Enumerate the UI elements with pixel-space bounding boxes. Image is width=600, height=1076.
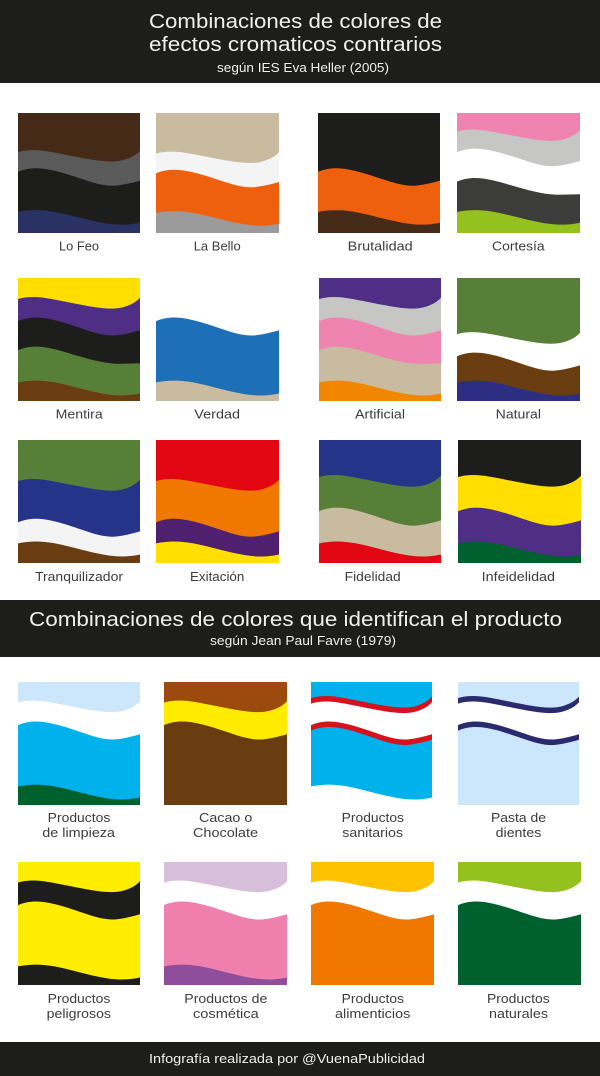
header: section 2 title band: Combinaciones de colores que identifican el producto [29, 609, 562, 631]
swatch: Artificial [319, 278, 441, 401]
label: La Bello: La Bello [194, 238, 241, 254]
label: pasta: dientes [496, 825, 542, 840]
label: naturales: naturales [489, 1006, 549, 1021]
panel: Exitación [156, 440, 279, 663]
header: section 1 title band: según IES Eva Heller (2005) [217, 60, 389, 75]
label: Infeidelidad: Infeidelidad [482, 569, 555, 584]
label: cosmética [184, 991, 267, 1021]
panel: Artificial [319, 278, 441, 482]
swatch: sanitarios [311, 682, 432, 800]
label: Mentira: Mentira [56, 406, 104, 422]
panel: La Bello [156, 113, 279, 310]
panel: Fidelidad [319, 440, 441, 652]
swatch: Fidelidad [319, 440, 441, 563]
label: Brutalidad: Brutalidad [348, 238, 413, 254]
header: section 2 title band [0, 600, 600, 657]
label: Artificial: Artificial [355, 406, 405, 422]
label: alimenticios [335, 991, 411, 1021]
label: cacao: Cacao o [199, 810, 252, 825]
label: naturales: Productos [487, 991, 550, 1006]
panel: Productos de cosmética [164, 862, 287, 1066]
swatch: Cortesía [457, 113, 580, 233]
label: Tranquilizador: Tranquilizador [35, 569, 124, 584]
swatch: La Bello [156, 113, 279, 233]
swatch: alimenticios [311, 862, 434, 985]
panel: Infeidelidad [458, 440, 581, 652]
swatch: naturales [458, 862, 581, 985]
label: naturales [487, 991, 550, 1021]
panel: Tranquilizador [18, 440, 140, 663]
label: sanitarios [342, 810, 405, 840]
panel: Productos de limpieza [18, 682, 140, 886]
label: alimenticios: Productos [342, 991, 405, 1006]
panel: Productos alimenticios [311, 862, 434, 1046]
panel: Cortesía [457, 113, 580, 309]
swatch: pasta [458, 682, 579, 805]
label: cosmética: cosmética [193, 1006, 260, 1021]
label: Exitación: Exitación [190, 569, 244, 584]
swatch: peligrosos [18, 862, 140, 985]
label: Fidelidad: Fidelidad [345, 569, 401, 584]
swatch: limpieza [18, 682, 140, 805]
panel: Lo Feo [18, 113, 140, 309]
label: sanitarios: Productos [342, 810, 405, 825]
panel: Mentira [18, 278, 140, 482]
footer band [0, 1042, 600, 1076]
panel: Cacao o Chocolate [164, 682, 287, 866]
label: Natural: Natural [496, 406, 541, 422]
label: pasta [491, 810, 546, 840]
label: cosmética: Productos de [184, 991, 267, 1006]
swatch: Exitación [156, 440, 279, 563]
label: peligrosos: peligrosos [47, 1006, 112, 1021]
header: section 1 title band: efectos cromaticos contrarios [149, 34, 442, 56]
footer band: Infografía realizada por @VuenaPublicidad [149, 1051, 425, 1066]
label: sanitarios: sanitarios [342, 825, 404, 840]
swatch: Tranquilizador [18, 440, 140, 563]
header: section 1 title band: Combinaciones de colores de [149, 11, 442, 33]
panel: Productos naturales [458, 862, 581, 1046]
swatch: Verdad [156, 318, 279, 401]
label: peligrosos: Productos [48, 991, 111, 1006]
swatch: Infeidelidad [458, 440, 581, 563]
swatch: cosmética [164, 862, 287, 985]
panel: Natural [457, 278, 580, 497]
label: limpieza: de limpieza [42, 825, 116, 840]
swatch: Lo Feo [18, 113, 140, 233]
label: alimenticios: alimenticios [335, 1006, 411, 1021]
panel: Brutalidad [318, 113, 440, 309]
label: Verdad: Verdad [194, 406, 240, 422]
label: peligrosos [47, 991, 112, 1021]
panel: Productos sanitarios [311, 682, 432, 886]
panel: Verdad [156, 318, 279, 482]
swatch: cacao [164, 682, 287, 805]
swatch: Brutalidad [318, 113, 440, 233]
label: cacao [193, 810, 258, 840]
panel: Pasta de dientes [458, 682, 579, 871]
label: limpieza: Productos [48, 810, 111, 825]
swatch: Natural [457, 278, 580, 401]
panel: Productos peligrosos [18, 862, 140, 1066]
swatch: Mentira [18, 278, 140, 401]
label: cacao: Chocolate [193, 825, 258, 840]
label: Cortesía: Cortesía [492, 238, 546, 254]
header: section 2 title band: según Jean Paul Favre (1979) [210, 633, 396, 648]
label: Lo Feo: Lo Feo [59, 238, 99, 254]
label: limpieza [42, 810, 116, 840]
header: section 1 title band [0, 0, 600, 83]
label: pasta: Pasta de [491, 810, 546, 825]
